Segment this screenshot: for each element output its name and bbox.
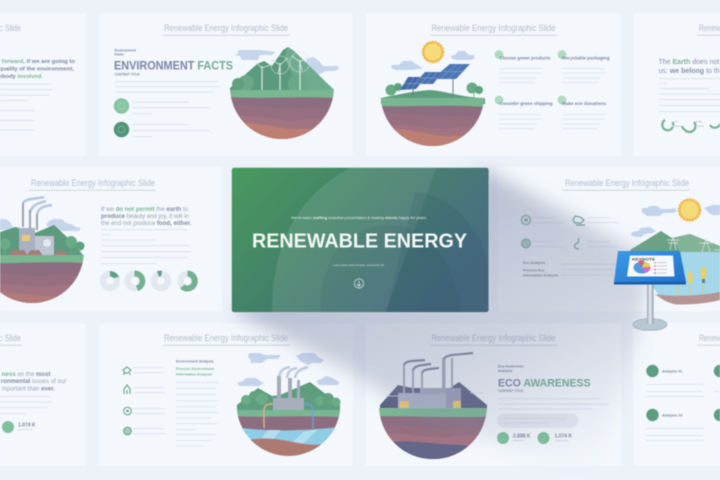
icon item 3 — [522, 239, 564, 248]
feature: consider green shipping: Consider green shipping — [500, 101, 553, 106]
analysis 01: Analysis 01 — [662, 370, 682, 374]
icon item 1 — [522, 216, 564, 224]
icon: down arrow in circle — [354, 279, 364, 288]
panel: eco awareness slide — [378, 334, 590, 460]
small label: Eco Awareness — [498, 364, 524, 368]
illustration: clouds — [0, 219, 81, 231]
quote text: ronmental issues of our — [1, 378, 66, 385]
icon: dark green badge — [114, 122, 129, 137]
slide subtitle — [29, 190, 156, 191]
panel: environment facts slide — [113, 24, 339, 140]
body text lines — [0, 84, 52, 131]
podium screen — [627, 256, 674, 276]
slide subtitle — [163, 35, 290, 36]
icon: keynote podium — [614, 251, 686, 330]
tagline: We've been crafting beautiful presentation & making clients happy for years. — [291, 215, 427, 220]
quote text: the end not produce food, either. — [101, 220, 191, 227]
feature: recyclable packaging — [558, 50, 610, 83]
illustration: water hemisphere — [640, 252, 720, 304]
illustration: sun — [678, 199, 700, 221]
illustration: clouds — [235, 50, 339, 74]
legend — [654, 262, 667, 274]
donut chart 3 — [154, 270, 168, 288]
illustration: clouds — [237, 353, 340, 386]
slide subtitle — [697, 35, 720, 36]
feature: choose green products: Choose green products — [500, 56, 551, 60]
slide subtitle — [430, 35, 557, 36]
illustration: factory — [8, 203, 69, 256]
illustration: earth hemisphere — [379, 408, 487, 459]
donut chart 1 — [662, 120, 673, 130]
pie chart — [634, 260, 651, 274]
illustration: pipes — [264, 404, 313, 428]
quote text: ness on the most — [2, 371, 50, 378]
quote text: If we do not permit the earth to — [101, 206, 188, 213]
illustration: dark mountains — [380, 382, 487, 408]
donut chart 1 — [103, 271, 119, 288]
slide title: Renewable Energy Infographic Slide — [565, 178, 689, 189]
analysis text lines — [176, 382, 219, 447]
podium board — [614, 251, 686, 284]
stat: 2.888 K — [497, 432, 531, 444]
donut label 1 — [672, 121, 680, 127]
callout pill — [497, 414, 578, 428]
feature: make eco donations — [558, 96, 606, 129]
illustration: clouds — [391, 51, 475, 70]
illustration: smoke — [279, 367, 308, 378]
icon list — [123, 367, 165, 435]
stat: 1.074 K: 1.074 K — [18, 422, 36, 428]
feature: recyclable packaging: Recyclable packaging — [562, 56, 610, 60]
panel: top-left slide — [0, 14, 86, 156]
feature: consider green shipping — [495, 96, 553, 129]
icon item 1 — [123, 367, 165, 375]
illustration: mountains and turbines — [230, 47, 334, 94]
stat: 1.074 K — [538, 432, 572, 444]
slide subtitle — [0, 345, 22, 346]
analysis labels: Process Eco — [523, 268, 545, 272]
quote text: produce beauty and joy, it will in — [101, 213, 189, 220]
icon: light green badge — [114, 98, 129, 114]
panel: solar slide — [380, 24, 610, 146]
heading: environment facts: ENVIRONMENT FACTS — [114, 60, 233, 72]
analysis 02 — [714, 365, 720, 392]
stat: 2.888 K: 2.888 K — [513, 434, 531, 440]
icon: sun — [422, 42, 444, 62]
heading: eco awareness: ECO AWARENESS — [498, 378, 590, 390]
illustration: solar panels — [400, 64, 470, 98]
icon item 4 — [124, 427, 165, 435]
quote text: The Earth does not — [658, 59, 719, 66]
slide subtitle — [430, 345, 557, 346]
analysis text lines — [561, 264, 619, 276]
podium base — [633, 318, 667, 330]
content title: CONTENT TITLE — [498, 389, 523, 393]
analysis 01 — [646, 365, 704, 397]
illustration: factory — [273, 376, 304, 410]
illustration: earth hemisphere — [230, 90, 334, 139]
analysis labels: Eco Analysis — [523, 261, 545, 265]
stat: 1.074 K: 1.074 K — [554, 434, 572, 440]
analysis subheading: Process Environment — [176, 367, 215, 371]
analysis 03: Analysis 03 — [662, 414, 682, 418]
podium stand — [647, 283, 654, 324]
illustration: mountains and trees — [237, 382, 340, 410]
slide title: Renewable Energy Infographic Slide — [31, 178, 155, 189]
illustration: earth hemisphere — [380, 98, 484, 146]
analysis subheading: Information Analysis — [176, 372, 212, 376]
panel: top-right slide — [633, 14, 720, 156]
analysis 03 — [646, 409, 704, 441]
hero subtext: Lorem ipsum dolor sit amet, consectetur elit — [333, 263, 384, 267]
illustration: mountains and trees — [0, 225, 84, 256]
donut chart 2 — [128, 270, 145, 291]
illustration: earth hemisphere with water — [236, 410, 340, 456]
illustration: hills and trees — [381, 82, 485, 104]
icon item 4 — [574, 238, 619, 249]
content title: CONTENT TITLE — [114, 72, 140, 76]
panel: bottom-left slide — [0, 324, 86, 466]
icon item 3 — [124, 407, 165, 415]
decorative arcs — [272, 168, 488, 312]
illustration: chimneys and smoke — [403, 353, 473, 395]
analysis labels: Information Analysis — [523, 274, 558, 278]
slide title: Renewable Energy Infographic Slide — [164, 23, 288, 34]
quote text: forward, if we are going to — [2, 59, 75, 65]
panel: middle-left factory slide — [0, 179, 198, 304]
slide title: Renewable Energy Infographic Slide — [432, 333, 556, 344]
slide subtitle — [697, 345, 720, 346]
body text lines — [0, 396, 52, 414]
quote text: mportant than ever. — [2, 386, 55, 392]
panel: middle-right keynote slide — [498, 167, 720, 312]
quote text: quality of the environment, — [0, 66, 74, 72]
feature: make eco donations: Make eco donations — [562, 101, 606, 106]
slide title: Renewable Energy Infographic Slide — [432, 23, 556, 34]
panel: process analysis slide — [122, 334, 341, 456]
illustration: factory building — [398, 388, 461, 408]
icon item 2 — [573, 216, 619, 225]
illustration: clouds — [631, 205, 720, 237]
analysis 04 — [714, 409, 720, 421]
slide title: Renewable Energy Infographic Slide — [164, 333, 288, 344]
donut chart 2 — [682, 122, 696, 132]
slide subtitle — [563, 190, 690, 191]
panel: hero slide — [232, 168, 489, 312]
quote text: us: we belong to th — [658, 68, 720, 75]
small label: Analysis — [498, 369, 512, 373]
body text lines — [659, 78, 720, 112]
body text lines — [101, 229, 191, 264]
cast shadow of hero slide — [232, 170, 650, 470]
panel: bottom-right slide — [633, 324, 720, 466]
slide subtitle — [163, 345, 290, 346]
body text lines — [498, 398, 609, 410]
icon item 2 — [124, 385, 165, 394]
illustration: earth hemisphere — [0, 255, 84, 303]
stat: 1.074 K — [2, 421, 36, 433]
donut label 2 — [696, 121, 704, 127]
hero title: RENEWABLE ENERGY — [252, 230, 467, 252]
icon row — [522, 216, 619, 249]
small label: Environment — [114, 48, 137, 52]
illustration: smoke — [23, 197, 52, 214]
podium label: KEYNOTE — [632, 258, 656, 262]
analysis heading: Environment Analysis — [176, 360, 214, 364]
small label: Facts — [114, 52, 124, 56]
body text lines — [115, 81, 220, 137]
donut chart 3 — [710, 124, 720, 128]
feature: choose green products — [495, 50, 551, 83]
donut chart 4 — [180, 270, 198, 291]
illustration: mountains and pylons — [630, 231, 720, 256]
